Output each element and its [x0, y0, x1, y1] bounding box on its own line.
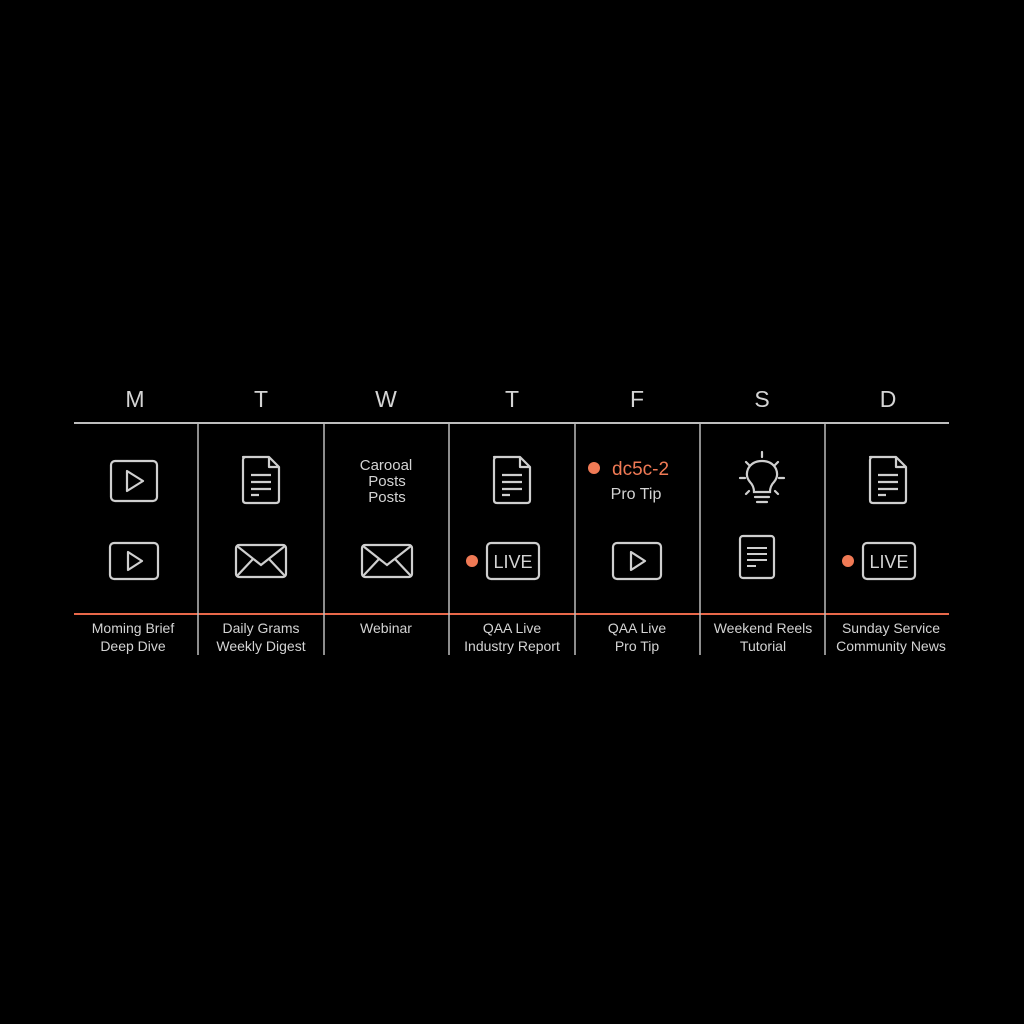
- header rule: [74, 422, 949, 424]
- bottom labels: Community News: [836, 638, 946, 654]
- bottom labels: Weekend Reels: [714, 620, 812, 636]
- day headers: F: [630, 386, 644, 412]
- bottom labels: Moming Brief: [92, 620, 174, 636]
- bottom labels: Industry Report: [464, 638, 560, 654]
- bottom labels: Tutorial: [740, 638, 786, 654]
- column F content: [588, 459, 669, 579]
- day headers: T: [505, 386, 519, 412]
- column T2 icons: [466, 457, 539, 579]
- day headers: W: [375, 386, 397, 412]
- column W content: Posts: [368, 489, 406, 506]
- bottom labels: Sunday Service: [842, 620, 940, 636]
- bottom labels: Deep Dive: [100, 638, 166, 654]
- bottom labels: Daily Grams: [222, 620, 300, 636]
- bottom labels: [92, 620, 946, 654]
- bottom labels: Weekly Digest: [216, 638, 306, 654]
- day headers: T: [254, 386, 268, 412]
- orange rule: [74, 613, 949, 615]
- day headers: [125, 386, 896, 412]
- day headers: S: [754, 386, 770, 412]
- column T icons: [236, 457, 286, 577]
- column S icons: [740, 452, 784, 578]
- column F content: dc5c-2: [612, 459, 669, 480]
- column W content: Posts: [368, 473, 406, 490]
- column M icons: [110, 461, 158, 579]
- bottom labels: QAA Live: [483, 620, 541, 636]
- day headers: D: [880, 386, 896, 412]
- column D icons: [842, 457, 915, 579]
- column W content: [360, 457, 412, 577]
- column F content: Pro Tip: [611, 486, 661, 503]
- column W content: Carooal: [360, 457, 412, 474]
- day headers: M: [125, 386, 145, 412]
- bottom labels: Webinar: [360, 620, 412, 636]
- bottom labels: Pro Tip: [615, 638, 659, 654]
- bottom labels: QAA Live: [608, 620, 666, 636]
